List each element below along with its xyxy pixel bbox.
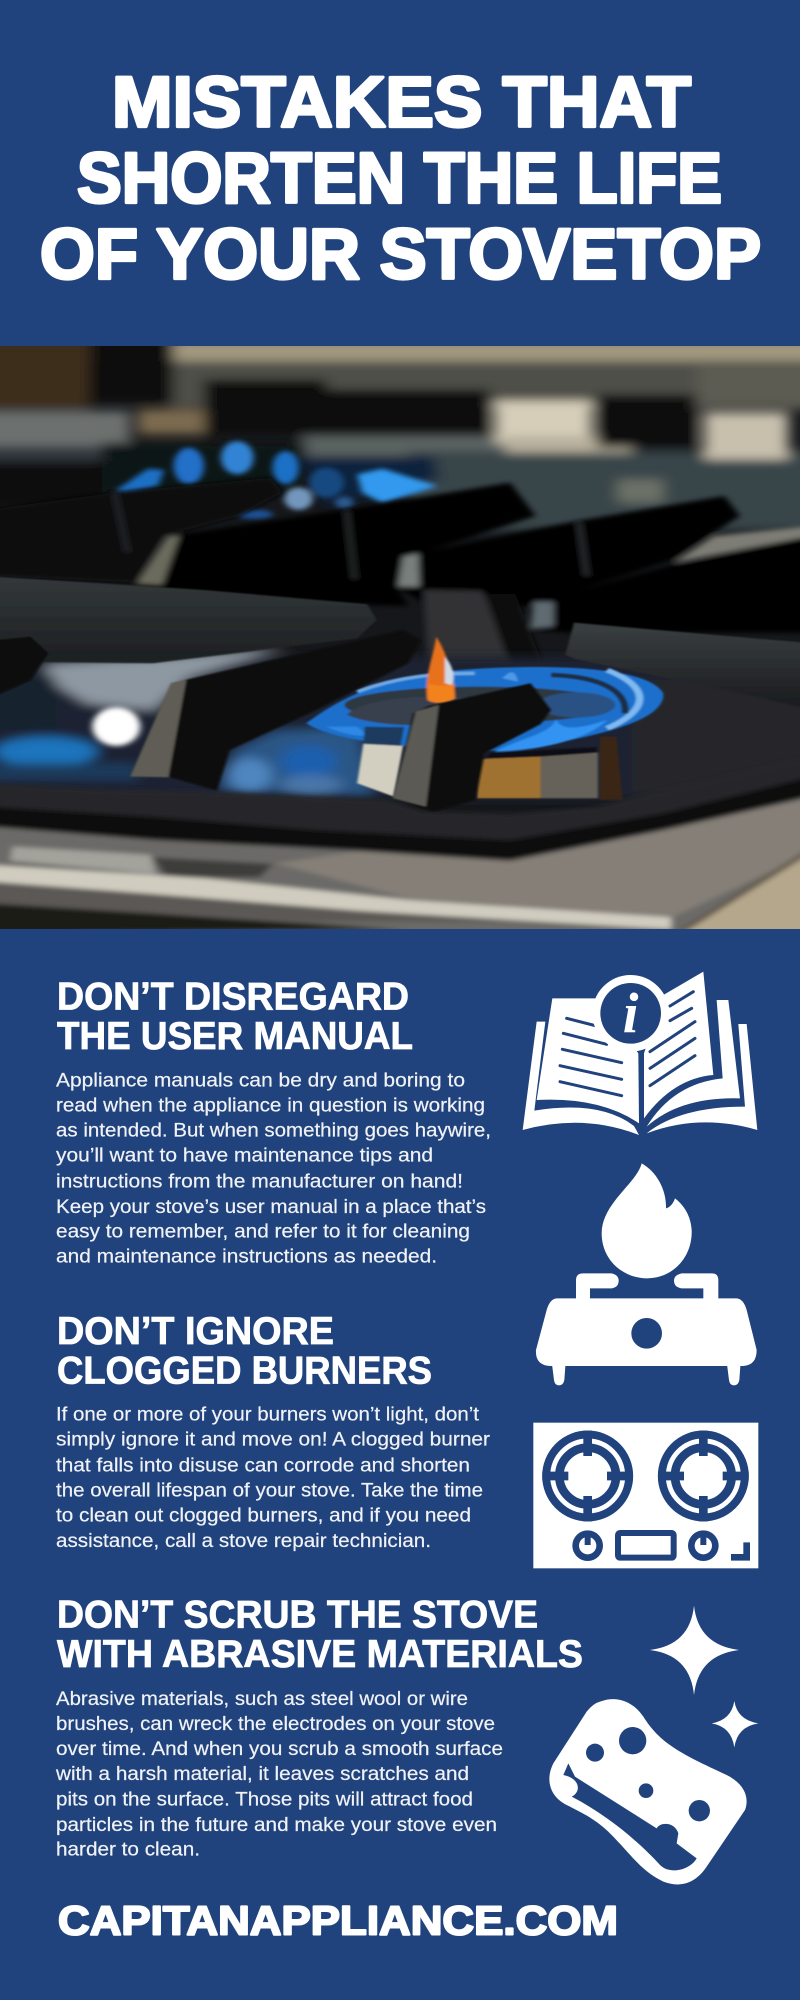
text block: user manual — [56, 1070, 491, 1268]
title — [40, 62, 761, 294]
heading: clogged burners: CLOGGED BURNERS — [57, 1350, 432, 1392]
icon: open book with info symbol — [523, 972, 757, 1135]
text block: abrasive materials: pits on the surface. Those pits will attract food — [56, 1790, 473, 1811]
text block: user manual: easy to remember, and refer to it for cleaning — [56, 1222, 470, 1242]
text block: abrasive materials: over time. And when you scrub a smooth surface — [56, 1739, 503, 1760]
text block: clogged burners: assistance, call a stove repair technician. — [56, 1531, 431, 1552]
heading: user manual: THE USER MANUAL — [57, 1015, 413, 1058]
text block: user manual: read when the appliance in question is working — [56, 1096, 485, 1117]
footer: website: CAPITANAPPLIANCE.COM — [58, 1898, 618, 1944]
text block: clogged burners: that falls into disuse can corrode and shorten — [56, 1455, 470, 1476]
text block: abrasive materials: Abrasive materials, such as steel wool or wire — [56, 1689, 468, 1710]
icon: flame on gas stove — [536, 1163, 757, 1385]
icon: two-burner cooktop — [533, 1423, 758, 1568]
text block: user manual: Appliance manuals can be dry and boring to — [56, 1070, 465, 1092]
title: OF YOUR STOVETOP — [40, 214, 761, 294]
heading: clogged burners — [57, 1310, 432, 1392]
photo: gas stove burner with blue flame — [0, 339, 800, 933]
text block: clogged burners — [56, 1404, 491, 1552]
icon: open book with info symbol: i — [623, 984, 639, 1046]
text block: clogged burners: the overall lifespan of your stove. Take the time — [56, 1481, 483, 1502]
text block: abrasive materials: brushes, can wreck the electrodes on your stove — [56, 1714, 495, 1735]
icon: sponge with sparkles — [549, 1606, 758, 1884]
text block: user manual: and maintenance instructions as needed. — [56, 1246, 437, 1268]
text block: abrasive materials: particles in the future and make your stove even — [56, 1815, 497, 1836]
text block: user manual: instructions from the manufacturer on hand! — [56, 1172, 463, 1193]
text block: abrasive materials: with a harsh material, it leaves scratches and — [55, 1764, 469, 1785]
heading: user manual: DON’T DISREGARD — [57, 976, 409, 1018]
text block: user manual: as intended. But when something goes haywire, — [56, 1121, 491, 1142]
text block: user manual: Keep your stove’s user manual in a place that’s — [56, 1197, 486, 1218]
title: SHORTEN THE LIFE — [77, 138, 722, 218]
text block: clogged burners: If one or more of your burners won’t light, don’t — [56, 1404, 480, 1425]
heading: abrasive materials: DON’T SCRUB THE STOVE — [57, 1594, 538, 1636]
text block: clogged burners: to clean out clogged burners, and if you need — [56, 1506, 471, 1526]
text block: user manual: you’ll want to have maintenance tips and — [56, 1146, 433, 1167]
heading: abrasive materials — [57, 1594, 583, 1676]
heading: abrasive materials: WITH ABRASIVE MATERIALS — [57, 1633, 583, 1676]
heading: user manual — [57, 976, 413, 1058]
heading: clogged burners: DON’T IGNORE — [57, 1310, 334, 1353]
text block: clogged burners: simply ignore it and move on! A clogged burner — [56, 1430, 491, 1451]
text block: abrasive materials: harder to clean. — [56, 1840, 200, 1861]
text block: abrasive materials — [55, 1689, 503, 1861]
title: MISTAKES THAT — [112, 62, 691, 142]
